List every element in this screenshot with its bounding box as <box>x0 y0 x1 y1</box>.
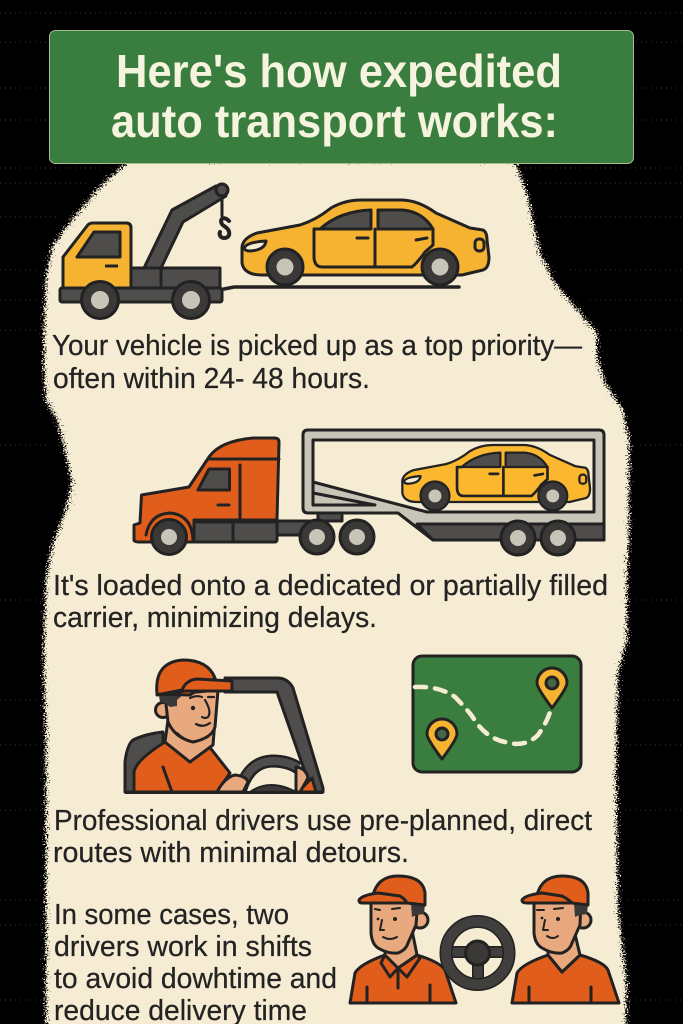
text: routes step: routes with minimal detours. <box>53 837 409 869</box>
truck wheels <box>152 520 575 555</box>
text: two driver shifts: drivers work in shifts <box>54 931 312 963</box>
title text: auto transport works: <box>111 95 558 147</box>
driver cap <box>157 660 232 695</box>
icon: yellow car being towed <box>242 200 489 285</box>
text: two driver shifts <box>54 899 337 1024</box>
left driver cap <box>359 876 425 905</box>
text: loading step: It's loaded onto a dedicated or partially filled <box>53 570 608 602</box>
text: two driver shifts: In some cases, two <box>54 899 289 931</box>
map pin: origin <box>427 719 457 759</box>
icon: semi truck with car carrier trailer <box>134 430 604 555</box>
icon: left driver <box>350 876 456 1003</box>
text: routes step <box>53 805 592 869</box>
icon: steering wheel <box>446 922 509 984</box>
text: loading step <box>53 570 608 634</box>
title text <box>111 45 562 147</box>
icon: tow truck <box>60 184 459 318</box>
title banner <box>50 30 634 164</box>
truck cab <box>134 438 279 542</box>
text: pickup step: Your vehicle is picked up as a top priority— <box>52 330 582 362</box>
car on trailer <box>402 445 590 510</box>
map pin: destination <box>537 668 567 708</box>
text: pickup step <box>52 330 582 395</box>
icon: route map with pins <box>413 656 581 772</box>
icon: driver at the wheel <box>125 660 323 792</box>
title text: Here's how expedited <box>116 45 562 97</box>
text: loading step: carrier, minimizing delays. <box>53 602 377 634</box>
cream paper background with torn edges <box>44 160 629 1024</box>
right driver cap <box>522 876 588 905</box>
text: routes step: Professional drivers use pre-planned, direct <box>54 805 592 837</box>
trailer <box>277 430 604 540</box>
text: pickup step: often within 24- 48 hours. <box>53 363 370 395</box>
icon: right driver <box>512 876 619 1003</box>
text: two driver shifts: to avoid dowhtime and <box>54 963 337 995</box>
